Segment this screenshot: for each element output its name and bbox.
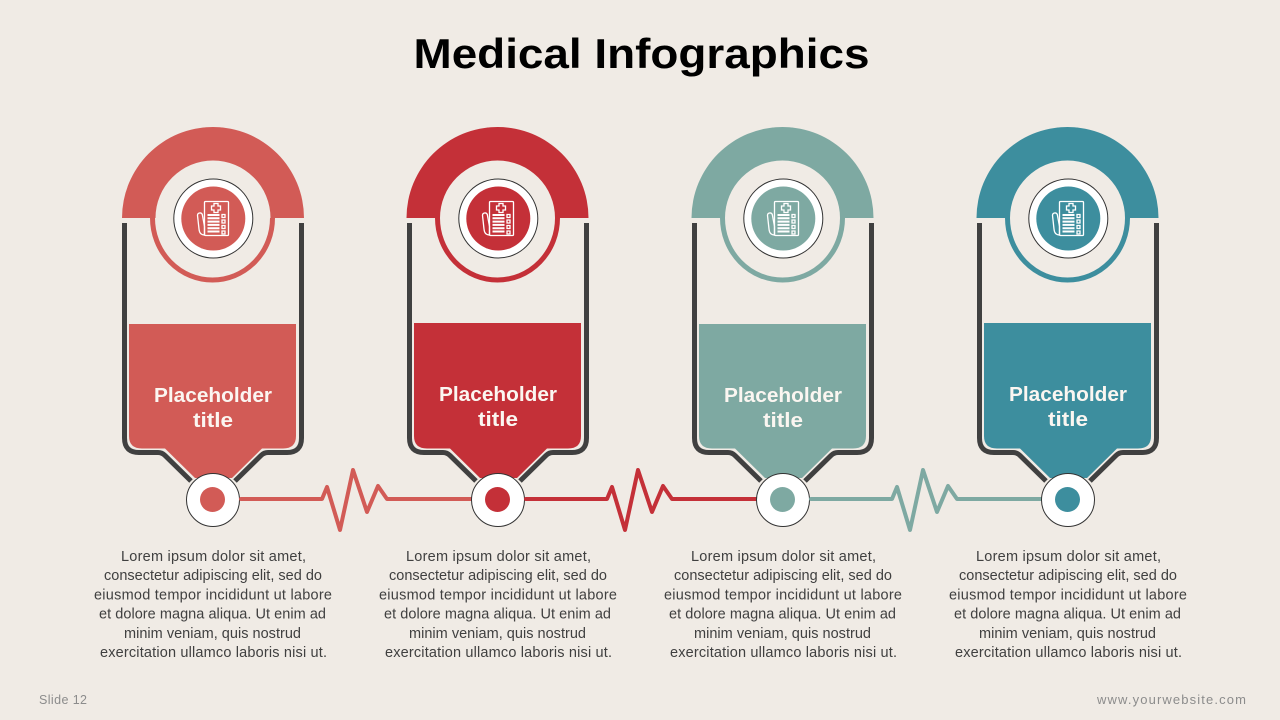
icon badge 4: [1029, 179, 1108, 258]
icon: medical report 3: [767, 202, 798, 236]
description 3: exercitation ullamco laboris nisi ut.: [670, 645, 897, 661]
description 4: exercitation ullamco laboris nisi ut.: [955, 645, 1182, 661]
card label 2: Placeholder: [439, 384, 557, 406]
footer: slide number: Slide 12: [39, 693, 87, 707]
description 4: [949, 549, 1187, 661]
arch 2: [406, 127, 588, 218]
title card 1: [129, 324, 296, 478]
node 3: [756, 474, 810, 526]
node 4: [1042, 474, 1094, 526]
card label 3: Placeholder: [724, 385, 842, 407]
card label 4: Placeholder: [1009, 384, 1127, 406]
panel: column 2: [379, 127, 617, 661]
card label 1: [154, 385, 272, 432]
pulse line 2: [526, 470, 757, 530]
description 3: [664, 549, 902, 661]
description 3: et dolore magna aliqua. Ut enim ad: [669, 607, 896, 623]
description 4: Lorem ipsum dolor sit amet,: [976, 549, 1161, 565]
description 1: et dolore magna aliqua. Ut enim ad: [99, 607, 326, 623]
panel: column 1: [94, 127, 332, 661]
panel: column 3: [664, 127, 902, 661]
icon: medical report 2: [482, 202, 514, 236]
description 4: et dolore magna aliqua. Ut enim ad: [954, 607, 1181, 623]
description 4: minim veniam, quis nostrud: [979, 626, 1156, 642]
card label 2: [439, 384, 557, 431]
description 2: et dolore magna aliqua. Ut enim ad: [384, 607, 611, 623]
title card 3: [699, 324, 866, 478]
title: Medical Infographics: [414, 30, 870, 77]
description 1: Lorem ipsum dolor sit amet,: [121, 549, 306, 565]
description 1: minim veniam, quis nostrud: [124, 626, 301, 642]
description 1: exercitation ullamco laboris nisi ut.: [100, 645, 327, 661]
panel: column 4: [949, 127, 1187, 661]
icon badge 3: [744, 179, 823, 258]
description 1: [94, 549, 332, 661]
ring 1: [152, 218, 272, 280]
title card 2: [414, 323, 581, 478]
card label 1: Placeholder: [154, 385, 272, 407]
description 1: consectetur adipiscing elit, sed do: [104, 568, 322, 584]
card label 4: [1009, 384, 1127, 431]
icon: medical report 1: [197, 202, 228, 236]
ring 3: [722, 218, 842, 280]
icon badge 1: [174, 179, 253, 258]
pulse line 1: [241, 470, 472, 530]
node 2: [472, 474, 524, 526]
card label 3: [724, 385, 842, 432]
title card 4: [984, 323, 1151, 478]
description 2: minim veniam, quis nostrud: [409, 626, 586, 642]
card label 2: title: [478, 409, 518, 431]
card label 3: title: [763, 410, 803, 432]
ring 4: [1008, 218, 1128, 280]
description 2: Lorem ipsum dolor sit amet,: [406, 549, 591, 565]
description 2: consectetur adipiscing elit, sed do: [389, 568, 607, 584]
ring 2: [438, 218, 558, 280]
description 4: eiusmod tempor incididunt ut labore: [949, 587, 1187, 603]
card label 4: title: [1048, 409, 1088, 431]
description 2: eiusmod tempor incididunt ut labore: [379, 587, 617, 603]
description 3: eiusmod tempor incididunt ut labore: [664, 587, 902, 603]
description 3: consectetur adipiscing elit, sed do: [674, 568, 892, 584]
arch 4: [976, 127, 1158, 218]
description 3: Lorem ipsum dolor sit amet,: [691, 549, 876, 565]
node 1: [186, 474, 240, 526]
footer: website: www.yourwebsite.com: [1096, 692, 1246, 707]
pulse line 3: [811, 470, 1042, 530]
icon: medical report 4: [1052, 202, 1084, 236]
description 2: exercitation ullamco laboris nisi ut.: [385, 645, 612, 661]
description 1: eiusmod tempor incididunt ut labore: [94, 587, 332, 603]
arch 1: [122, 127, 304, 218]
icon badge 2: [459, 179, 538, 258]
description 4: consectetur adipiscing elit, sed do: [959, 568, 1177, 584]
description 3: minim veniam, quis nostrud: [694, 626, 871, 642]
description 2: [379, 549, 617, 661]
arch 3: [692, 127, 874, 218]
stethoscope frame 1: [124, 223, 302, 481]
card label 1: title: [193, 410, 233, 432]
stethoscope frame 2: [410, 223, 586, 481]
stethoscope frame 4: [980, 223, 1156, 481]
stethoscope frame 3: [694, 223, 872, 481]
